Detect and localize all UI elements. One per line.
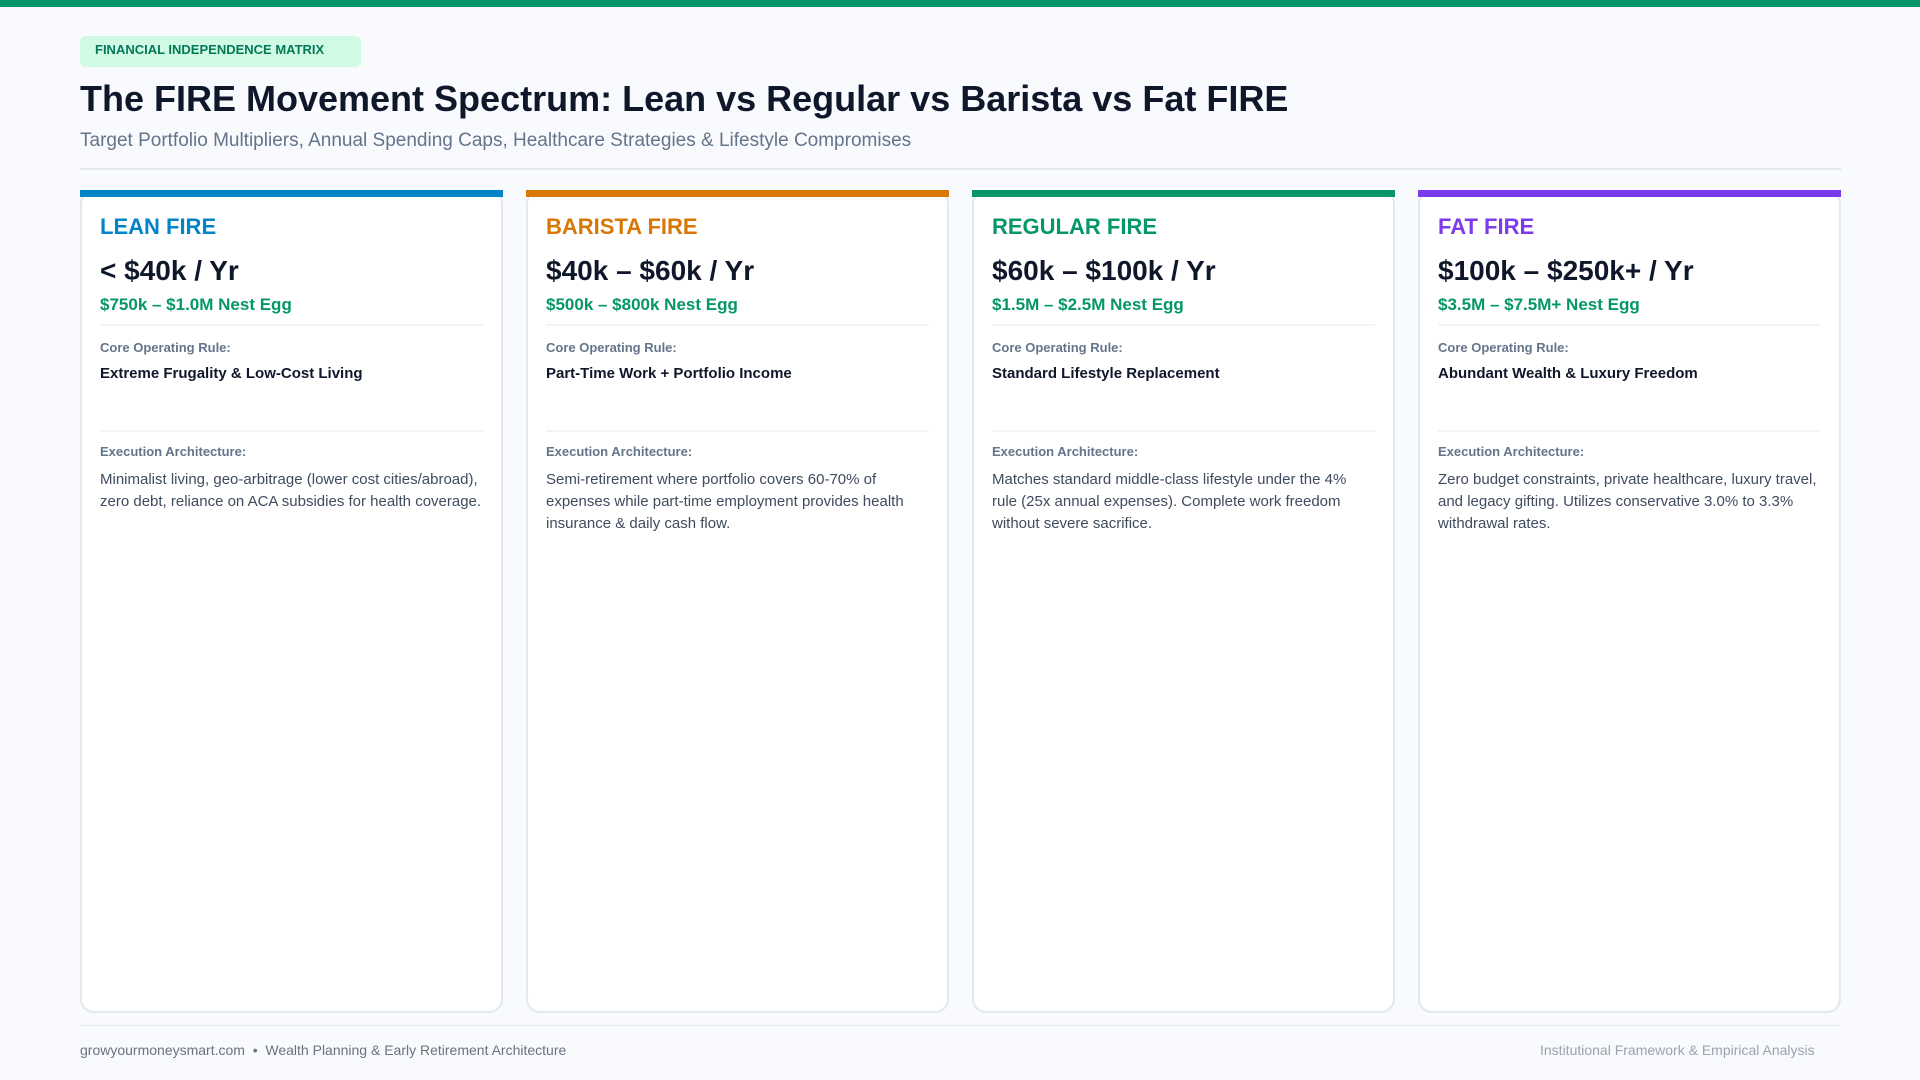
title: The FIRE Movement Spectrum: Lean vs Regular vs Barista vs Fat FIRE	[80, 78, 1288, 119]
execution description	[992, 471, 1346, 532]
annual spending: $60k – $100k / Yr	[992, 255, 1216, 286]
execution label: Execution Architecture:	[546, 444, 692, 459]
plan name: REGULAR FIRE	[992, 214, 1157, 239]
execution description: Zero budget constraints, private healthcare, luxury travel,	[1438, 471, 1817, 488]
nest egg: $3.5M – $7.5M+ Nest Egg	[1438, 295, 1640, 314]
panel: Fat FIRE	[1418, 190, 1841, 1013]
nest egg: $750k – $1.0M Nest Egg	[100, 295, 292, 314]
execution description: Minimalist living, geo-arbitrage (lower cost cities/abroad),	[100, 471, 478, 488]
nest egg: $1.5M – $2.5M Nest Egg	[992, 295, 1184, 314]
core rule label: Core Operating Rule:	[100, 340, 231, 355]
execution label: Execution Architecture:	[1438, 444, 1584, 459]
annual spending: $100k – $250k+ / Yr	[1438, 255, 1694, 286]
footer right: Institutional Framework & Empirical Analysis	[1540, 1042, 1815, 1058]
execution description	[546, 471, 904, 532]
execution description	[1438, 471, 1817, 532]
plan name: LEAN FIRE	[100, 214, 216, 239]
core rule label: Core Operating Rule:	[546, 340, 677, 355]
panel: Lean FIRE	[80, 190, 503, 1013]
core rule value: Standard Lifestyle Replacement	[992, 365, 1220, 382]
annual spending: < $40k / Yr	[100, 255, 239, 286]
plan name: BARISTA FIRE	[546, 214, 698, 239]
panel: Barista FIRE	[526, 190, 949, 1013]
core rule label: Core Operating Rule:	[1438, 340, 1569, 355]
execution label: Execution Architecture:	[100, 444, 246, 459]
execution description: zero debt, reliance on ACA subsidies for health coverage.	[100, 493, 481, 510]
footer left: growyourmoneysmart.com • Wealth Planning & Early Retirement Architecture	[80, 1042, 566, 1058]
core rule value: Part-Time Work + Portfolio Income	[546, 365, 792, 382]
annual spending: $40k – $60k / Yr	[546, 255, 754, 286]
core rule value: Abundant Wealth & Luxury Freedom	[1438, 365, 1698, 382]
execution description: and legacy gifting. Utilizes conservative 3.0% to 3.3%	[1438, 493, 1793, 510]
plan name: FAT FIRE	[1438, 214, 1534, 239]
execution description: Semi-retirement where portfolio covers 60-70% of	[546, 471, 876, 488]
core rule label: Core Operating Rule:	[992, 340, 1123, 355]
badge: financial independence matrix	[80, 36, 361, 67]
execution description: withdrawal rates.	[1438, 515, 1551, 532]
subtitle: Target Portfolio Multipliers, Annual Spending Caps, Healthcare Strategies & Lifestyle Compromises	[80, 130, 911, 151]
execution description	[100, 471, 481, 510]
nest egg: $500k – $800k Nest Egg	[546, 295, 738, 314]
execution label: Execution Architecture:	[992, 444, 1138, 459]
execution description: without severe sacrifice.	[992, 515, 1152, 532]
panel: Regular FIRE	[972, 190, 1395, 1013]
badge label: FINANCIAL INDEPENDENCE MATRIX	[95, 42, 324, 57]
execution description: expenses while part-time employment provides health	[546, 493, 904, 510]
execution description: rule (25x annual expenses). Complete work freedom	[992, 493, 1341, 510]
core rule value: Extreme Frugality & Low-Cost Living	[100, 365, 363, 382]
execution description: Matches standard middle-class lifestyle under the 4%	[992, 471, 1346, 488]
execution description: insurance & daily cash flow.	[546, 515, 730, 532]
top accent bar	[0, 0, 1920, 7]
